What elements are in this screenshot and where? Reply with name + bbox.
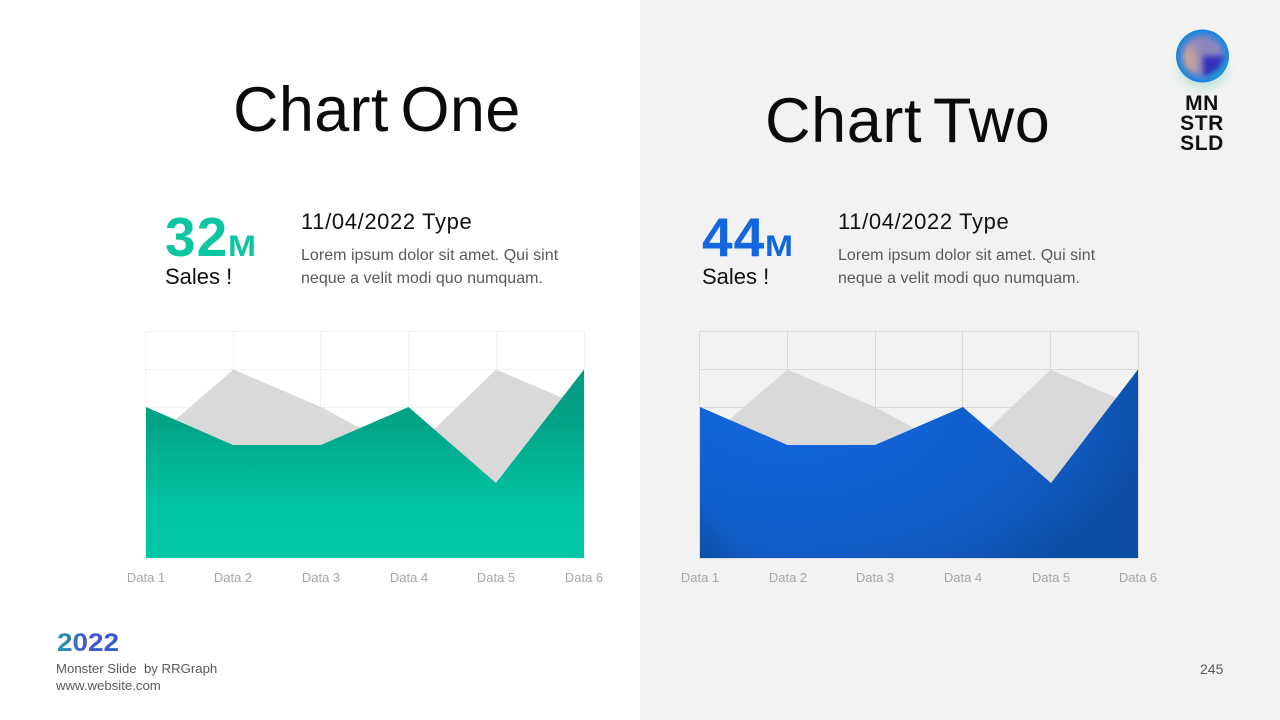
axis labels: chart one: Data 5: [477, 570, 515, 585]
text block: description two: neque a velit modi quo numquam.: [838, 270, 1080, 287]
axis labels: chart two: [681, 570, 1157, 585]
stat: 32M: M: [228, 230, 256, 263]
title: chart two: Chart Two: [765, 86, 1050, 156]
label: sales one: Sales !: [165, 264, 232, 289]
series: green area: [146, 370, 584, 558]
axis labels: chart two: Data 4: [944, 570, 982, 585]
axis labels: chart two: Data 2: [769, 570, 807, 585]
axis labels: chart one: Data 2: [214, 570, 252, 585]
text block: description two: [838, 247, 1096, 287]
stat: 32M: [165, 206, 256, 268]
stat: 44M: 44: [702, 206, 765, 268]
text block: description two: Lorem ipsum dolor sit amet. Qui sint: [838, 247, 1095, 264]
heading: date one: 11/04/2022 Type: [301, 209, 472, 234]
stat: 44M: M: [765, 230, 793, 263]
footer text: Monster Slide by RRGraph: [56, 661, 217, 676]
axis labels: chart one: Data 1: [127, 570, 165, 585]
chart: area chart two: [700, 332, 1138, 558]
logo text: [1180, 92, 1224, 155]
axis labels: chart two: Data 1: [681, 570, 719, 585]
series: grey area one: [146, 370, 584, 558]
axis labels: chart one: Data 4: [390, 570, 428, 585]
title: chart one: Chart One: [233, 75, 521, 145]
series: grey area two: [700, 370, 1138, 558]
logo text: SLD: [1180, 132, 1224, 155]
footer text: [56, 661, 217, 692]
text block: description one: Lorem ipsum dolor sit amet. Qui sint: [301, 247, 558, 264]
panel: right background: [640, 0, 1280, 720]
icon: logo sphere: [1174, 28, 1232, 88]
series: blue area: [700, 370, 1138, 558]
chart: area chart one: [58, 30, 1232, 651]
label: sales two: Sales !: [702, 264, 769, 289]
text block: description one: [301, 247, 558, 287]
text block: description one: neque a velit modi quo numquam.: [301, 270, 543, 287]
axis labels: chart one: Data 6: [565, 570, 603, 585]
axis labels: chart one: Data 3: [302, 570, 340, 585]
footer text: www.website.com: [56, 678, 161, 692]
heading: date two: 11/04/2022 Type: [838, 209, 1009, 234]
axis labels: chart two: Data 6: [1119, 570, 1157, 585]
stat: 32M: 32: [165, 206, 228, 268]
logo text: STR: [1180, 112, 1224, 135]
logo text: MN: [1185, 92, 1219, 115]
axis labels: chart two: Data 5: [1032, 570, 1070, 585]
stat: 44M: [702, 206, 793, 268]
axis labels: chart one: [127, 570, 603, 585]
axis labels: chart two: Data 3: [856, 570, 894, 585]
page number: 245: [1200, 661, 1223, 677]
year: 2022: 2022: [57, 629, 119, 657]
